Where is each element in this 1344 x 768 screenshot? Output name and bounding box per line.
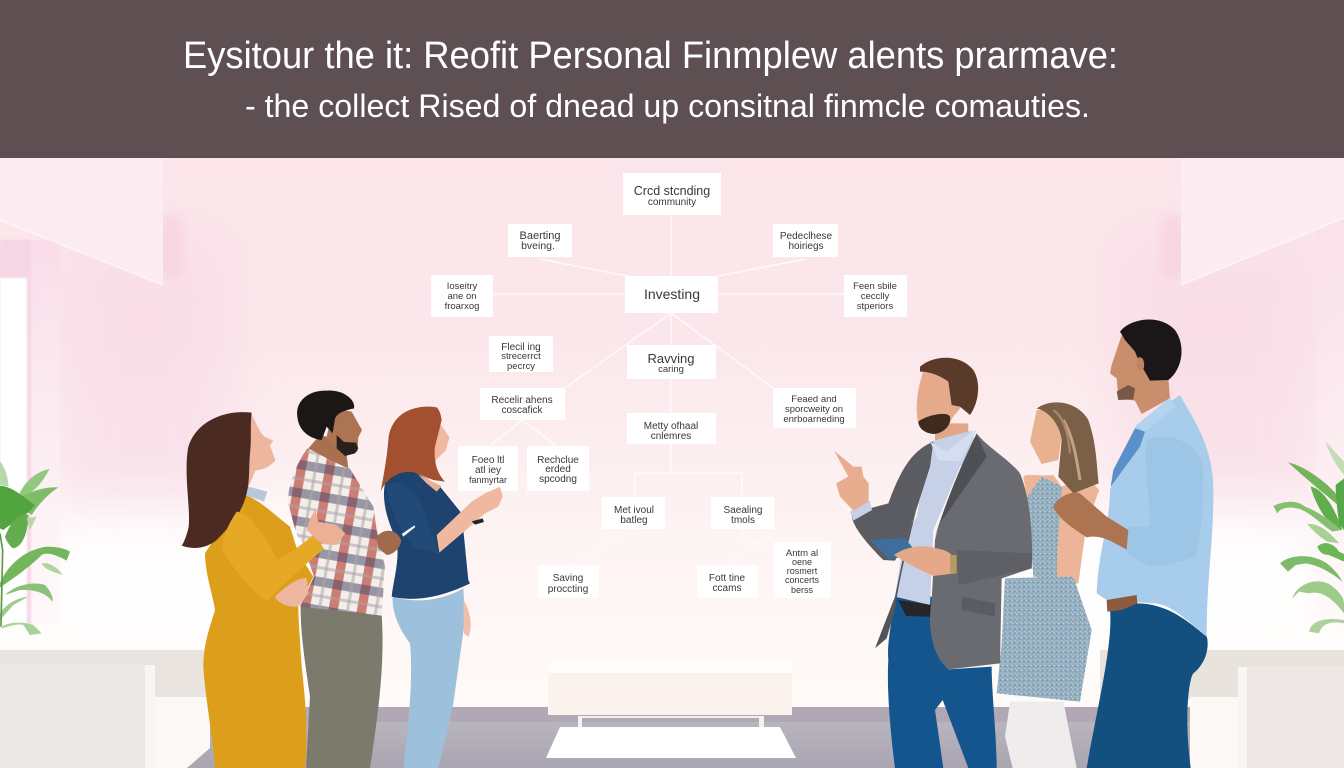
person: man in plaid shirt bbox=[288, 391, 415, 768]
right white bench bbox=[1100, 625, 1344, 768]
room background bbox=[0, 158, 1344, 768]
node: Recelir: coscafick bbox=[501, 405, 544, 416]
node: Flecil ing bbox=[489, 336, 553, 372]
node: Recelir: Recelir ahens bbox=[491, 395, 553, 406]
left white bench bbox=[0, 625, 210, 768]
node: Foeo: Foeo ltl bbox=[472, 455, 504, 466]
node: Metty bbox=[627, 413, 716, 444]
title line 1: Eysitour the it: Reofit Personal Finmplew alents prarmave: bbox=[183, 35, 1118, 77]
node: middle left: froarxog bbox=[445, 301, 479, 312]
node: Antm: rosmert bbox=[787, 566, 818, 576]
left ceiling soffit bbox=[0, 158, 182, 285]
node: Foeo: fanmyrtar bbox=[469, 475, 507, 485]
node: Net: Met ivoul bbox=[614, 505, 654, 516]
node: Antm: Antm al bbox=[786, 548, 818, 559]
floor and skirting bbox=[150, 707, 1190, 768]
node: Fott: Fott tine bbox=[709, 573, 745, 584]
node: Feerd: enrboarneding bbox=[783, 414, 845, 425]
node: Saeling: tmols bbox=[731, 515, 755, 526]
node: middle right: Feen sbile bbox=[853, 281, 897, 292]
node: Recelir bbox=[480, 388, 565, 420]
person: woman in navy top bbox=[381, 407, 503, 768]
node: middle right bbox=[844, 275, 907, 317]
node: Antm: berss bbox=[791, 585, 814, 595]
node: Fott bbox=[697, 565, 758, 598]
node: Foeo bbox=[458, 446, 518, 491]
mind map connectors bbox=[490, 215, 844, 565]
node: Rechclue: erded bbox=[545, 464, 571, 475]
node: Flecil ing: Flecil ing bbox=[501, 342, 541, 353]
node: Saving: proccting bbox=[548, 584, 588, 595]
node: middle left bbox=[431, 275, 493, 317]
node: middle left: ane on bbox=[447, 291, 477, 302]
node: Metty: Metty ofhaal bbox=[644, 421, 698, 432]
title line 2: - the collect Rised of dnead up consitnal finmcle comauties. bbox=[245, 88, 1090, 124]
node: Investing centre: Investing bbox=[644, 286, 700, 302]
node: Feerd: sporcweity on bbox=[785, 404, 843, 415]
node: top community box: Crcd stcnding bbox=[634, 184, 710, 198]
node: upper left: bveing. bbox=[521, 240, 555, 252]
left plant bbox=[0, 462, 70, 635]
node: Rechclue: spcodng bbox=[539, 474, 577, 485]
mind map bbox=[431, 173, 907, 598]
node: Saving bbox=[538, 565, 599, 598]
person: woman in yellow dress bbox=[182, 412, 345, 768]
node: Rechclue: Rechclue bbox=[537, 455, 579, 466]
right column bbox=[1316, 215, 1344, 630]
node: Investing centre bbox=[625, 276, 718, 313]
node: middle left: Ioseitry bbox=[447, 281, 478, 292]
node: middle right: cecclly bbox=[861, 291, 889, 302]
right plant bbox=[1273, 442, 1344, 633]
left window bbox=[0, 240, 31, 635]
node: Foeo: atl iey bbox=[475, 465, 501, 476]
node: Antm: oene bbox=[792, 557, 812, 567]
node: Ravving: Ravving bbox=[648, 351, 694, 366]
node: upper right: hoiriegs bbox=[788, 241, 824, 252]
node: Antm: concerts bbox=[785, 575, 820, 585]
node: Metty: cnlemres bbox=[651, 431, 691, 442]
node: upper right bbox=[773, 224, 838, 257]
node: Feerd bbox=[773, 388, 856, 428]
node: Saeling bbox=[711, 497, 774, 529]
node: upper left bbox=[508, 224, 572, 257]
node: Flecil ing: strecerrct bbox=[501, 351, 541, 362]
node: Antm bbox=[774, 542, 831, 598]
node: Net: batleg bbox=[620, 515, 648, 526]
node: Saeling: Saealing bbox=[724, 505, 762, 516]
person: woman in floral dress bbox=[997, 402, 1099, 768]
node: Ravving bbox=[627, 345, 716, 379]
person: man in blue shirt bbox=[1053, 319, 1213, 768]
node: upper left: Baerting bbox=[520, 230, 560, 242]
center bench and rug bbox=[546, 660, 796, 758]
person: man in grey blazer with tablet bbox=[834, 358, 1032, 768]
node: Net bbox=[602, 497, 665, 529]
right ceiling soffit bbox=[1162, 158, 1344, 285]
left column bbox=[30, 240, 60, 630]
node: Fott: ccams bbox=[713, 583, 741, 594]
node: Ravving: caring bbox=[658, 364, 684, 375]
node: middle right: stperiors bbox=[857, 301, 893, 312]
node: Rechclue bbox=[527, 446, 589, 491]
node: upper right: Pedeclhese bbox=[780, 231, 833, 242]
node: Saving: Saving bbox=[553, 573, 583, 584]
node: top community box bbox=[623, 173, 721, 215]
node: top community box: community bbox=[648, 197, 696, 208]
node: Feerd: Feaed and bbox=[791, 394, 837, 405]
node: Flecil ing: pecrcy bbox=[507, 361, 535, 372]
title banner bbox=[0, 0, 1344, 158]
